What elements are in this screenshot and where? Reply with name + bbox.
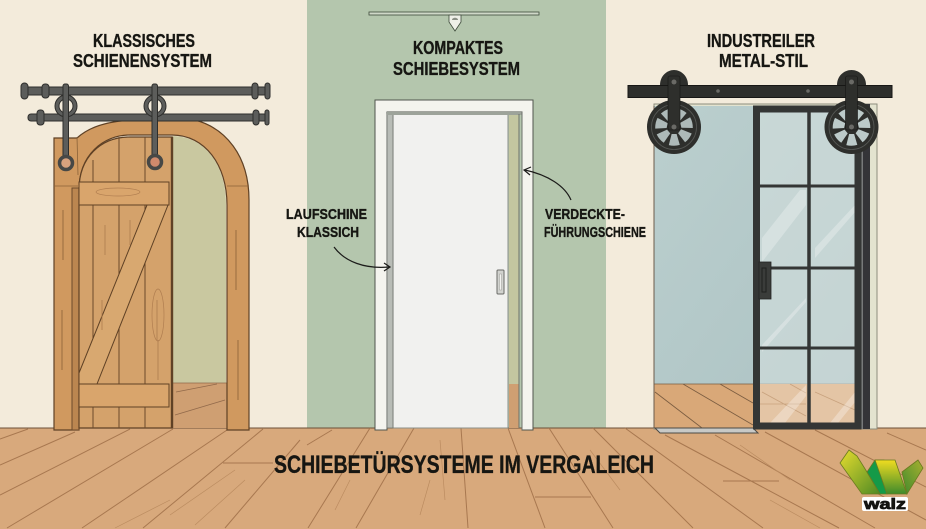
panel: left wall <box>0 0 308 429</box>
panel: right wall <box>606 0 926 429</box>
wheel right <box>824 70 878 154</box>
label: verdeckte führungsschiene: VERDECKTE- <box>545 207 625 223</box>
left guide band <box>387 114 393 428</box>
frame top shadow <box>387 112 522 115</box>
lower iron rail <box>28 110 269 125</box>
opening floor <box>654 384 860 428</box>
arrow: to hidden track <box>524 167 571 200</box>
heading: kompaktes schiebesystem: KOMPAKTES <box>413 38 503 58</box>
heading: klassisches schienensystem: SCHIENENSYSTEM <box>73 51 212 71</box>
label: laufschine klassich <box>286 207 367 241</box>
heading: industreiler metal-stil <box>707 31 815 71</box>
hidden track icon <box>369 12 539 31</box>
black rail <box>628 86 892 98</box>
compact door system <box>369 12 539 430</box>
heading: klassisches schienensystem <box>73 31 212 71</box>
arrow: to door left edge <box>334 247 390 271</box>
wheel left <box>647 70 701 154</box>
side slot <box>509 114 519 384</box>
sliding wooden door <box>79 137 172 428</box>
logo: walz <box>840 450 923 513</box>
panel: center green wall <box>307 0 607 429</box>
arch frame <box>54 120 249 430</box>
classic door system <box>21 83 270 430</box>
heading: kompaktes schiebesystem: SCHIEBESYSTEM <box>393 59 520 79</box>
heading: klassisches schienensystem: KLASSISCHES <box>93 31 195 51</box>
right guide line <box>519 112 522 430</box>
wooden floor <box>0 428 926 529</box>
label: laufschine klassich: LAUFSCHINE <box>286 207 367 223</box>
white sliding door <box>393 114 508 428</box>
door hanger right <box>146 84 164 168</box>
door handle <box>497 270 504 294</box>
main title: SCHIEBETÜRSYSTEME IM VERGALEICH <box>274 450 654 479</box>
door pull <box>759 262 771 299</box>
arch opening <box>172 136 226 383</box>
frame wall opening <box>654 104 877 429</box>
heading: kompaktes schiebesystem <box>393 38 520 79</box>
heading: industreiler metal-stil: INDUSTREILER <box>707 31 815 51</box>
door frame <box>375 100 533 430</box>
label: verdeckte führungsschiene <box>544 207 646 241</box>
blue wall <box>654 106 860 384</box>
door hanger left <box>57 84 75 170</box>
heading: industreiler metal-stil: METAL-STIL <box>719 51 808 71</box>
label: verdeckte führungsschiene: FÜHRUNGSCHIENE <box>544 224 646 241</box>
label: laufschine klassich: KLASSICH <box>297 225 359 241</box>
left jamb inner piece <box>72 188 79 430</box>
opening floor <box>172 383 227 428</box>
threshold <box>655 428 758 433</box>
glass door <box>756 104 870 429</box>
industrial door system <box>628 70 892 433</box>
logo: walz: walz <box>863 496 906 513</box>
slot floor <box>509 384 519 428</box>
frame joints and grain <box>54 137 249 400</box>
upper iron rail <box>21 83 270 99</box>
